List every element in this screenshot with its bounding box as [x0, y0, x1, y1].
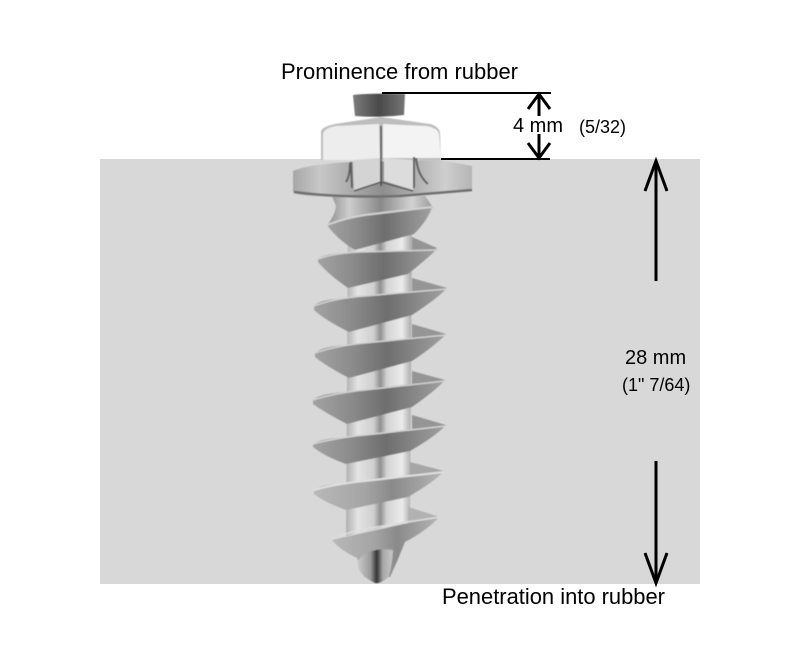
thread 1: [318, 237, 437, 288]
label: 1 inch 7/64: (1" 7/64): [622, 375, 690, 395]
thread 5: [313, 415, 446, 464]
thread 4: [313, 371, 445, 424]
stud neck: [328, 196, 433, 224]
arrow: 28 mm down: [645, 461, 667, 583]
label: 28 mm: 28 mm: [625, 347, 686, 369]
arrow: 4 mm up: [528, 94, 550, 116]
thread 0: [327, 207, 432, 250]
heading: penetration into rubber: Penetration into rubber: [442, 584, 665, 609]
hex head nut: [321, 117, 441, 191]
arrow: 4 mm down: [528, 134, 550, 158]
stud shaft: [346, 215, 412, 536]
heading: prominence from rubber: Prominence from rubber: [281, 59, 518, 84]
thread 3: [315, 324, 446, 378]
dimension lines: prominence: [382, 93, 551, 159]
illustration: ice stud screw: [293, 94, 472, 583]
pointed tip: [357, 549, 393, 583]
panel: rubber cross-section: [100, 159, 700, 584]
carbide pin: [353, 94, 405, 117]
thread 7 and cone: [332, 507, 440, 583]
thread 2: [314, 278, 447, 332]
label: 4 mm: 4 mm: [513, 115, 563, 137]
label: 5/32: (5/32): [579, 117, 626, 137]
thread 6: [314, 462, 444, 510]
flange washer: [293, 160, 472, 197]
arrow: 28 mm up: [645, 161, 667, 281]
